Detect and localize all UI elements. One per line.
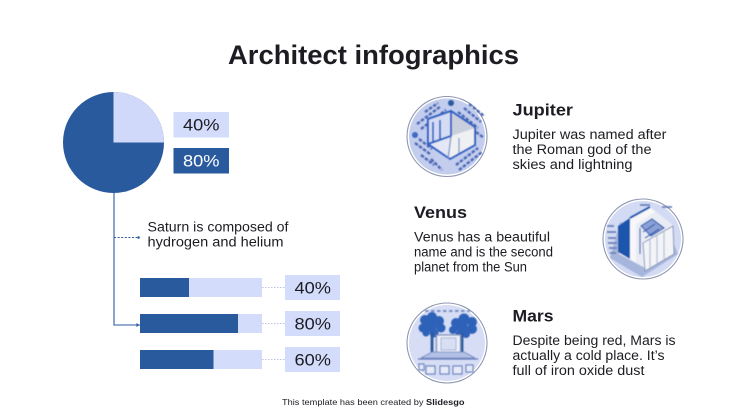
saturn text: hydrogen and helium bbox=[148, 234, 284, 250]
title: Architect infographics bbox=[228, 40, 519, 70]
icon: mars garden pavilion bbox=[407, 303, 487, 383]
bar 60% bbox=[140, 347, 340, 372]
legend: 80%: 80% bbox=[183, 152, 220, 170]
jupiter text: the Roman god of the bbox=[512, 142, 652, 157]
jupiter text bbox=[512, 127, 667, 172]
saturn text: Saturn is composed of bbox=[148, 220, 289, 234]
jupiter text: skies and lightning bbox=[512, 157, 632, 172]
bar 40%: 40% bbox=[294, 278, 331, 298]
mars text: full of iron oxide dust bbox=[512, 363, 645, 378]
legend: 80% bbox=[174, 148, 229, 174]
bar chart bbox=[140, 275, 340, 372]
legend: 40% bbox=[174, 112, 229, 138]
icon: jupiter room plan bbox=[407, 96, 487, 176]
footer credit: This template has been created by Slidesgo bbox=[282, 397, 464, 407]
pie chart bbox=[63, 92, 164, 193]
bar 60%: 60% bbox=[294, 350, 331, 370]
icon: venus building section bbox=[603, 199, 683, 279]
bar 80% bbox=[140, 311, 340, 336]
bar 40% bbox=[140, 275, 340, 300]
bar 80%: 80% bbox=[294, 314, 331, 334]
venus text bbox=[414, 230, 553, 274]
jupiter heading: Jupiter bbox=[512, 100, 573, 120]
saturn text bbox=[148, 220, 289, 250]
venus heading: Venus bbox=[414, 203, 467, 222]
venus text: Venus has a beautiful bbox=[414, 230, 550, 244]
jupiter text: Jupiter was named after bbox=[512, 127, 667, 142]
mars text: actually a cold place. It’s bbox=[512, 348, 665, 363]
venus text: name and is the second bbox=[414, 244, 553, 260]
legend: 40%: 40% bbox=[183, 116, 220, 134]
venus text: planet from the Sun bbox=[414, 260, 527, 274]
connector from pie to bar chart bbox=[114, 193, 140, 327]
mars text: Despite being red, Mars is bbox=[512, 333, 676, 348]
mars heading: Mars bbox=[512, 306, 554, 326]
mars text bbox=[512, 333, 676, 378]
